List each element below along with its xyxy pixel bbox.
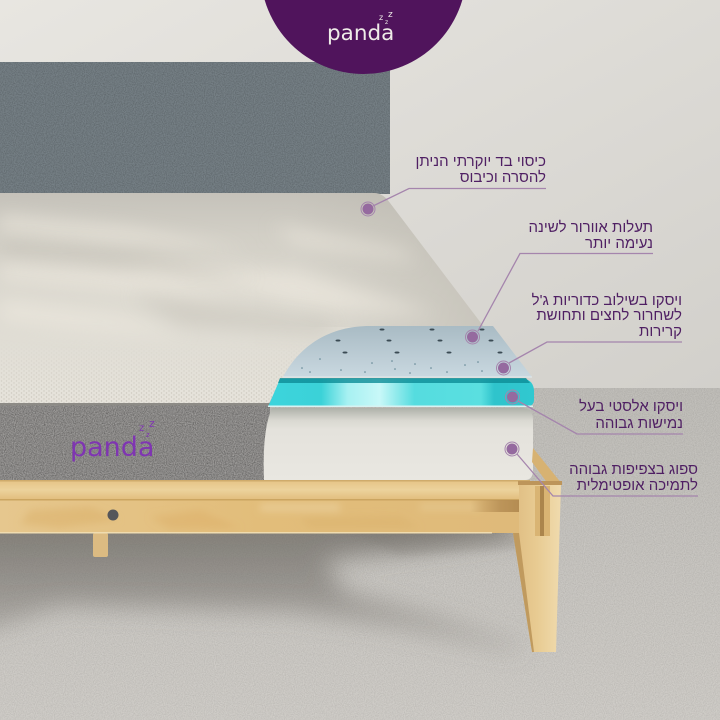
callout: high density foam: לתמיכה אופטימלית	[577, 477, 698, 494]
callout: removable cover	[361, 153, 546, 216]
callout: gel beads visco: לשחרור לחצים ותחושת	[536, 307, 682, 324]
mattress grey side panel with logo	[0, 403, 270, 480]
mattress top cover	[0, 193, 490, 406]
wall background	[0, 0, 720, 388]
top logo badge	[260, 0, 466, 74]
callout: ventilation channels: נעימה יותר	[585, 235, 653, 252]
side logo	[70, 417, 155, 463]
sunlight streaks	[3, 214, 398, 312]
front leg	[513, 484, 561, 652]
callout: elastic visco	[506, 390, 683, 434]
side logo: panda	[70, 432, 154, 463]
bed frame	[0, 448, 562, 652]
ventilation holes	[336, 328, 502, 354]
callout: ventilation channels: תעלות אוורור לשינה	[529, 219, 653, 236]
top logo badge: z	[388, 10, 393, 20]
gel speckles	[301, 358, 483, 374]
side logo: z	[146, 431, 150, 439]
callout: ventilation channels	[466, 219, 653, 344]
callout: high density foam	[505, 442, 698, 496]
callout: elastic visco: נמישות גבוהה	[595, 415, 683, 432]
layer: high density foam	[264, 408, 533, 480]
callout: removable cover: להסרה וכיבוס	[460, 169, 546, 186]
callout: gel beads visco: ויסקו בשילוב כדוריות ג'ל	[532, 292, 682, 309]
callout: gel beads visco	[496, 292, 682, 375]
side logo: z	[149, 417, 155, 430]
top logo badge: z	[385, 19, 388, 26]
top logo badge: panda	[327, 21, 394, 46]
layer: ventilated blue foam	[283, 326, 532, 377]
lower rail	[0, 500, 520, 533]
small back leg	[93, 533, 108, 557]
far side rail	[532, 448, 562, 484]
floor	[0, 388, 720, 720]
callout: removable cover: כיסוי בד יוקרתי הניתן	[415, 153, 546, 170]
callout: gel beads visco: קרירות	[639, 323, 682, 340]
layer: gel memory foam	[268, 378, 534, 407]
callout: high density foam: ספוג בצפיפות גבוהה	[569, 461, 698, 478]
callout: elastic visco: ויסקו אלסטי בעל	[579, 398, 683, 415]
side logo: z	[139, 423, 144, 434]
top rail	[0, 480, 530, 500]
wood grain	[20, 504, 480, 529]
frame bolt	[108, 510, 118, 520]
headboard	[0, 62, 390, 194]
top logo badge: z	[379, 13, 383, 22]
